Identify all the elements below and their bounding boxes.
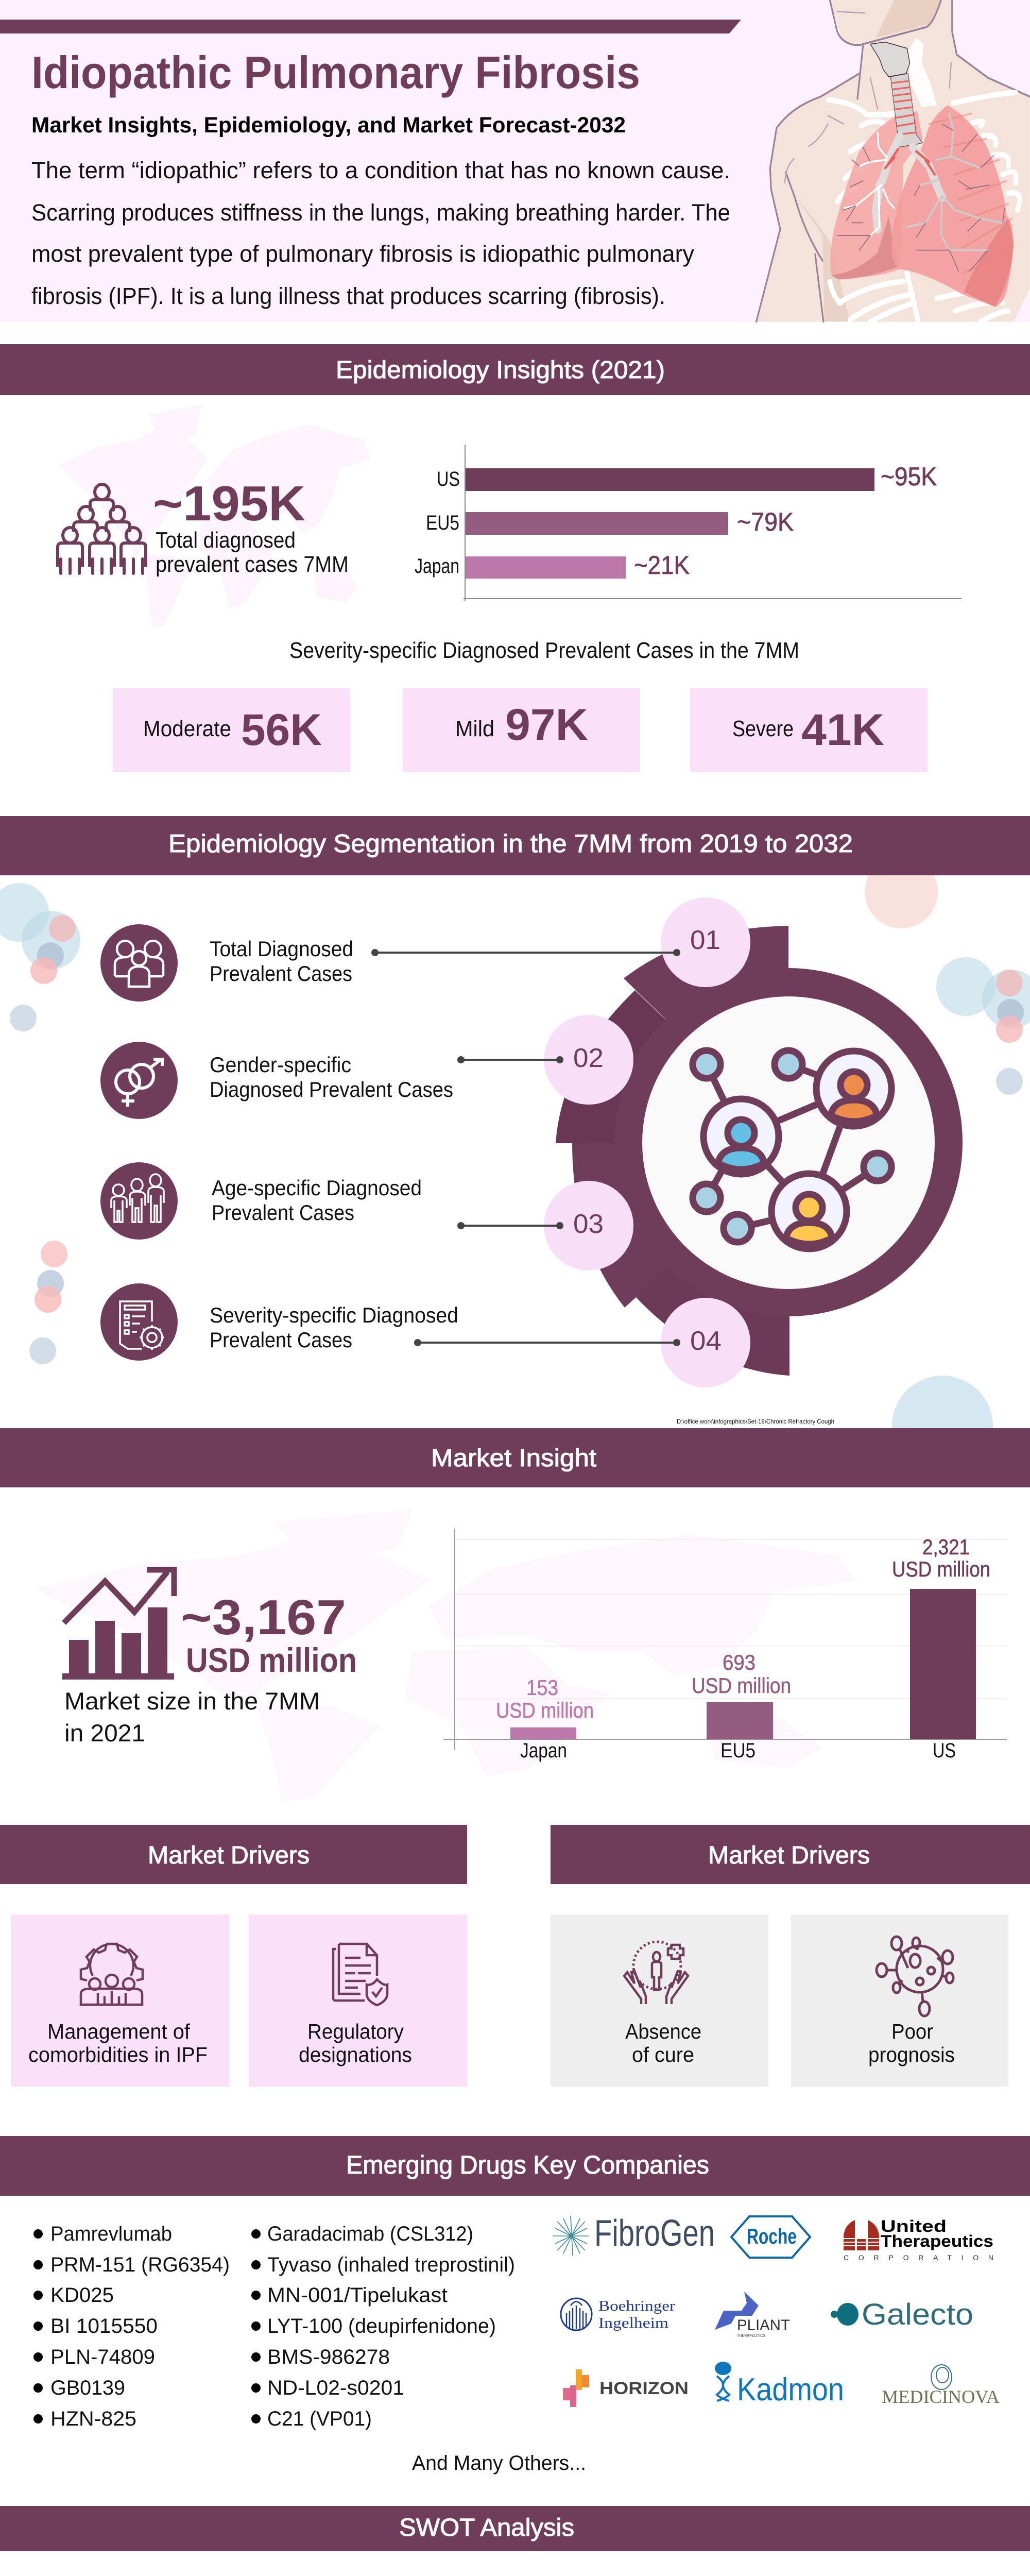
intro paragraph: The term “idiopathic” refers to a condition that has no known cause.: [31, 157, 730, 183]
heading bar left: Market Drivers: [148, 1842, 310, 1869]
logo: Boehringer Ingelheim: [561, 2298, 675, 2331]
heading bar: [0, 816, 1030, 875]
icon: three age figures: [111, 1174, 164, 1222]
logo: Medicinova: MEDICINOVA: [882, 2386, 1000, 2407]
drug list column 1: Pamrevlumab: [50, 2223, 172, 2245]
decorative bubbles: [0, 875, 1030, 1428]
heading bar right: Market Drivers: [708, 1842, 870, 1869]
logo: United Therapeutics: Therapeutics: [881, 2232, 993, 2250]
heading bar: [0, 2136, 1030, 2196]
icon: people with gear: [81, 1944, 143, 2005]
row: severity specific: [100, 1283, 458, 1361]
card: moderate: 56K: [241, 705, 322, 755]
bar chart: market by region: 2,321: [922, 1535, 970, 1559]
heading bar: Epidemiology Insights (2021): [336, 357, 665, 384]
logo: Boehringer Ingelheim: Boehringer: [598, 2298, 675, 2314]
card: moderate: [113, 688, 350, 772]
stat: market size: Market size in the 7MM: [64, 1687, 320, 1715]
card: poor prognosis: [791, 1914, 1008, 2087]
callout: 02: 02: [573, 1043, 604, 1073]
bar chart: cases by region: Japan: [415, 555, 459, 578]
logo: Boehringer Ingelheim: Ingelheim: [598, 2315, 669, 2331]
severity caption: Severity-specific Diagnosed Prevalent Cases in the 7MM: [289, 638, 799, 663]
intro paragraph: Scarring produces stiffness in the lungs, making breathing harder. The: [31, 199, 730, 226]
callout: 03: [457, 1181, 633, 1270]
bar chart: market by region: 153: [526, 1675, 558, 1700]
stat: market size: in 2021: [64, 1719, 145, 1747]
top accent bar: [0, 20, 741, 33]
bar chart: market by region: US: [933, 1739, 956, 1762]
subtitle: Market Insights, Epidemiology, and Market Forecast-2032: [31, 113, 626, 138]
logo: Pliant: [715, 2292, 790, 2338]
vertebrae: [907, 38, 936, 107]
stat: total cases: ~195K: [153, 476, 305, 531]
logo: FibroGen: FibroGen: [594, 2213, 715, 2254]
intro paragraph: [31, 157, 730, 309]
logo: Horizon: HORIZON: [599, 2379, 689, 2398]
drug list column 2: ND-L02-s0201: [267, 2377, 404, 2399]
icon: network of people: [693, 1050, 891, 1249]
logo: Roche: [731, 2216, 810, 2258]
heading bar: [0, 2506, 1030, 2551]
drug list column 1: BI 1015550: [50, 2315, 158, 2337]
drug list column 2: [251, 2223, 515, 2430]
row: age specific: [100, 1162, 422, 1240]
bar chart: cases by region: US: [437, 468, 460, 490]
stat: market size: USD million: [186, 1641, 357, 1679]
heading bar: SWOT Analysis: [399, 2514, 574, 2541]
bar chart: cases by region: ~79K: [737, 507, 794, 536]
heading bar left: [0, 1825, 467, 1884]
heading bar: [0, 1428, 1030, 1487]
card: absence of cure: [551, 1914, 768, 2087]
drug list column 2: Garadacimab (CSL312): [267, 2223, 473, 2245]
logo: Galecto: Galecto: [862, 2298, 973, 2331]
card: moderate: Moderate: [143, 716, 231, 741]
bar chart: cases by region: [415, 445, 962, 601]
panel: intro header: [0, 0, 1030, 322]
bar chart: cases by region: ~21K: [634, 551, 690, 580]
drug list column 1: [33, 2223, 230, 2430]
heading bar: [0, 344, 1030, 395]
row: total diagnosed: Total Diagnosed: [210, 937, 353, 961]
heading bar right: [551, 1825, 1030, 1884]
drug list column 1: GB0139: [50, 2377, 125, 2399]
stat: market size: [64, 1590, 357, 1747]
drug list column 1: HZN-825: [50, 2408, 136, 2430]
note: and many others: And Many Others...: [412, 2452, 586, 2475]
bar chart: cases by region: ~95K: [881, 462, 937, 491]
row: total diagnosed: [100, 924, 353, 1002]
bar chart: market by region: USD million: [496, 1698, 594, 1722]
bar chart: market by region: USD million: [692, 1673, 791, 1698]
card: regulatory designations: [249, 1914, 467, 2087]
bronchi: [876, 137, 942, 229]
stat: market size: ~3,167: [181, 1590, 346, 1645]
callout: 02: [457, 1015, 633, 1105]
bar chart: market by region: Japan: [520, 1739, 567, 1762]
card: severe: Severe: [732, 716, 794, 741]
icon: rising bar chart: [62, 1570, 174, 1680]
small file path note: D:\office work\infographics\Set-18\Chronic Refractory Cough: [677, 1418, 834, 1425]
larynx: [870, 42, 910, 77]
drug list column 2: MN-001/Tipelukast: [267, 2284, 448, 2307]
card: severe: 41K: [801, 705, 884, 755]
card: regulatory designations: Regulatory: [307, 2020, 404, 2043]
bar chart: market by region: [443, 1529, 1007, 1762]
row: severity specific: Prevalent Cases: [210, 1328, 352, 1352]
card: mild: Mild: [455, 716, 494, 741]
card: poor prognosis: prognosis: [868, 2043, 955, 2066]
icon: people group: [58, 484, 146, 573]
drug list column 1: PRM-151 (RG6354): [50, 2253, 230, 2276]
bar chart: market by region: EU5: [720, 1739, 756, 1762]
card: management of comorbidities: Management of: [47, 2020, 191, 2043]
row: age specific: Prevalent Cases: [212, 1200, 354, 1225]
callout: 03: 03: [573, 1209, 604, 1239]
row: age specific: Age-specific Diagnosed: [212, 1176, 422, 1200]
hub: segmented circle: [556, 926, 963, 1376]
callout: 04: 04: [690, 1326, 722, 1356]
logo: United Therapeutics: United: [881, 2217, 947, 2235]
card: mild: 97K: [505, 700, 588, 750]
icon: hands holding person: [624, 1942, 688, 2004]
right lung: [891, 105, 1013, 307]
icon: people: [115, 941, 163, 987]
intro paragraph: most prevalent type of pulmonary fibrosis is idiopathic pulmonary: [31, 241, 694, 267]
drug list column 1: PLN-74809: [50, 2346, 155, 2368]
ribs: [828, 93, 1020, 321]
logo: United Therapeutics: CORPORATION: [844, 2253, 993, 2262]
logo: Roche: Roche: [747, 2224, 797, 2248]
drug list column 2: BMS-986278: [267, 2346, 390, 2368]
stat: total cases: prevalent cases 7MM: [156, 552, 349, 577]
stat: total cases: [153, 476, 349, 577]
callout: 01: [371, 897, 750, 987]
logo: Horizon: [563, 2369, 689, 2407]
logo: FibroGen: [553, 2213, 715, 2256]
card: regulatory designations: designations: [299, 2043, 412, 2066]
drug list column 2: Tyvaso (inhaled treprostinil): [267, 2253, 515, 2276]
card: absence of cure: of cure: [632, 2043, 694, 2066]
row: total diagnosed: Prevalent Cases: [210, 961, 352, 986]
logo: Medicinova: [882, 2365, 1000, 2407]
left lung: [830, 111, 923, 279]
trachea: [890, 74, 923, 147]
row: gender specific: Diagnosed Prevalent Cases: [210, 1077, 453, 1101]
row: gender specific: [100, 1042, 453, 1119]
drug list column 2: C21 (VP01): [267, 2408, 372, 2430]
bar chart: market by region: USD million: [892, 1557, 990, 1581]
bar chart: cases by region: EU5: [426, 512, 459, 534]
logo: Kadmon: [715, 2362, 844, 2408]
logo: Pliant: PLIANT: [737, 2317, 790, 2334]
icon: virus: [877, 1937, 953, 2016]
logo: United Therapeutics: [844, 2217, 993, 2262]
panel: market drivers: [0, 1825, 1030, 2087]
logo: Pliant: THERAPEUTICS: [737, 2333, 765, 2338]
card: absence of cure: Absence: [625, 2020, 701, 2043]
card: severe: [690, 688, 928, 772]
bar chart: market by region: 693: [723, 1650, 756, 1674]
card: management of comorbidities: [11, 1914, 229, 2087]
card: mild: [403, 688, 640, 772]
section: SWOT analysis: [0, 2506, 1030, 2576]
heading bar: Emerging Drugs Key Companies: [346, 2150, 709, 2179]
card: poor prognosis: Poor: [891, 2020, 933, 2043]
icon: document with gear: [120, 1301, 164, 1350]
drug list column 2: LYT-100 (deupirfenidone): [267, 2315, 496, 2337]
world map background: [59, 405, 370, 629]
drug list column 1: KD025: [50, 2284, 114, 2307]
row: gender specific: Gender-specific: [210, 1053, 351, 1077]
logo: Kadmon: Kadmon: [737, 2372, 844, 2408]
heading bar: Epidemiology Segmentation in the 7MM from 2019 to 2032: [168, 830, 853, 858]
section: epidemiology segmentation: [0, 816, 1030, 1477]
section: epidemiology insights: [0, 344, 1030, 772]
icon: document with shield: [333, 1944, 387, 2005]
heading bar: Market Insight: [431, 1445, 596, 1472]
row: severity specific: Severity-specific Diagnosed: [210, 1303, 458, 1327]
stat: total cases: Total diagnosed: [156, 528, 296, 553]
intro paragraph: fibrosis (IPF). It is a lung illness that produces scarring (fibrosis).: [31, 283, 665, 309]
callout: 04: [414, 1298, 750, 1387]
world map background: [36, 1510, 855, 1802]
card: management of comorbidities: comorbidities in IPF: [28, 2043, 208, 2066]
callout: 01: 01: [690, 925, 720, 955]
icon: gender symbols: [116, 1059, 162, 1107]
section: emerging drugs and key companies: [0, 2136, 1030, 2475]
illustration: torso and lungs: [757, 0, 1030, 321]
section: market insight: [0, 1428, 1030, 1802]
title: Idiopathic Pulmonary Fibrosis: [31, 47, 640, 98]
